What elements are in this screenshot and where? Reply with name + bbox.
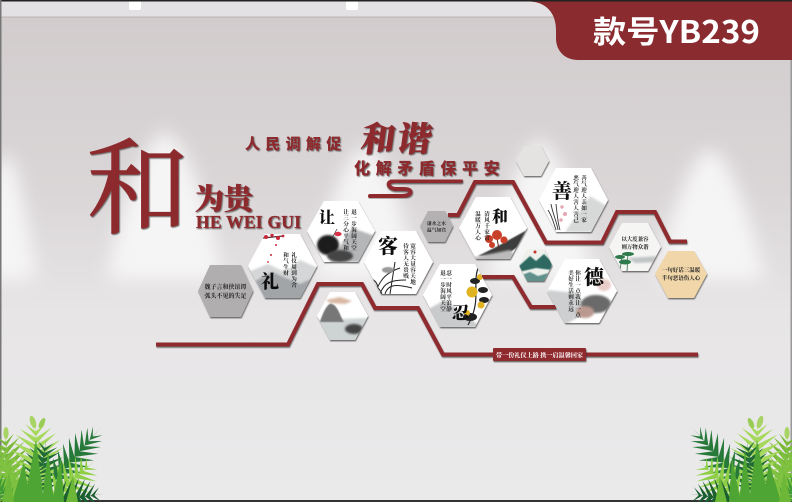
panel: de bbox=[547, 259, 617, 325]
panel: de: 你让一点我让一点 bbox=[574, 269, 581, 319]
panel: ke bbox=[364, 231, 433, 294]
red line: upper route bbox=[448, 182, 687, 242]
panel: grey motto left: 弧头不见的失足 bbox=[204, 292, 247, 300]
panel: he: 清风千家常 bbox=[483, 210, 490, 242]
slogan bbox=[245, 121, 505, 179]
red banner: 带一份礼仪上路 携一肩温馨回家 bbox=[495, 352, 583, 360]
red line: lower long route bbox=[156, 284, 698, 354]
panel: grey motto left bbox=[198, 265, 253, 317]
model number badge bbox=[530, 2, 792, 60]
calligraphy character: 客 bbox=[378, 234, 398, 258]
model number badge: 款号YB239 bbox=[593, 7, 760, 52]
sub-character: 为贵 bbox=[195, 183, 258, 216]
panel: beige motto: 半句恶语伤人心 bbox=[662, 274, 702, 282]
panel: small landscape bbox=[317, 292, 368, 342]
red line: middle route bbox=[482, 277, 556, 307]
calligraphy character: 礼 bbox=[261, 272, 279, 292]
plant: bottom right bbox=[679, 415, 792, 502]
panel: beige motto bbox=[655, 251, 707, 298]
panel: grey motto small: 温气如宾 bbox=[427, 226, 446, 234]
panel: shan bbox=[539, 168, 610, 232]
calligraphy character: 让 bbox=[319, 208, 335, 227]
red swirl line bbox=[370, 181, 461, 196]
panel: de: 美好生活则永远 bbox=[567, 269, 574, 313]
big character: 和 bbox=[87, 133, 189, 248]
pinyin: HE WEI GUI bbox=[196, 212, 301, 232]
panel: he: 温暖万人心 bbox=[474, 210, 481, 241]
panel: beige motto: 一句好话三温暖 bbox=[662, 266, 701, 274]
panel: bamboo motto: 则万物众谐 bbox=[622, 243, 649, 251]
slogan emphasised characters: 和谐 bbox=[359, 121, 436, 159]
panel: ke: 宽容大量容天地 bbox=[409, 242, 416, 285]
calligraphy character: 善 bbox=[552, 180, 572, 203]
panel: bamboo motto bbox=[609, 223, 661, 272]
panel: shan: 恶气迎人害人害己 bbox=[572, 174, 579, 223]
slogan line two: 化解矛盾保平安 bbox=[354, 155, 505, 179]
panel: li: 礼仪周到为舍 bbox=[290, 251, 297, 289]
panel: teal landscape bbox=[519, 249, 552, 282]
panel: he bbox=[459, 197, 527, 262]
panel: grey motto left: 魏子言和侠谊谭 bbox=[204, 283, 247, 291]
panel: shan: 善气迎人亲如一家 bbox=[580, 174, 587, 223]
panel: rang: 退一步海阔天空 bbox=[350, 208, 357, 251]
panel: li: 和气生财 bbox=[282, 251, 289, 277]
slogan line one: 人民调解促 bbox=[245, 133, 347, 154]
plant: bottom left bbox=[0, 415, 114, 502]
panel: li bbox=[248, 233, 318, 300]
panel: blank top hexagon bbox=[516, 146, 549, 176]
panel: rang: 让三分心平气和 bbox=[342, 208, 349, 252]
main title bbox=[87, 133, 301, 248]
panel: grey motto small bbox=[420, 211, 453, 242]
calligraphy character: 德 bbox=[584, 265, 606, 289]
calligraphy character: 和 bbox=[492, 207, 508, 226]
panel: ren: 忍一时风平浪静 bbox=[445, 269, 452, 313]
panel: ren: 退一步海阔天空 bbox=[439, 269, 446, 312]
calligraphy character: 忍 bbox=[452, 303, 471, 323]
red banner bbox=[493, 348, 586, 361]
panel: ke: 待客人无贵贱 bbox=[402, 242, 409, 280]
panel: ren bbox=[423, 264, 492, 330]
panel: rang bbox=[307, 201, 375, 262]
panel: grey motto small: 谦水之水 bbox=[427, 220, 446, 227]
panel: bamboo motto: 以大度兼容 bbox=[622, 235, 649, 243]
